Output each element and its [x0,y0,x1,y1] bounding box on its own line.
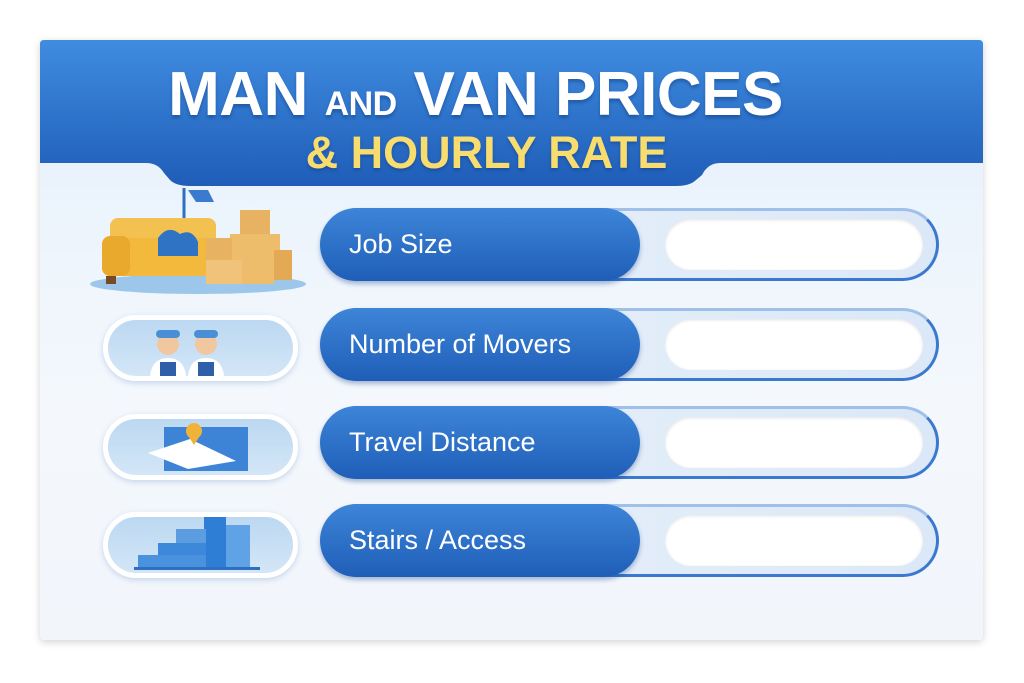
row: Number of Movers [317,308,939,387]
header banner [40,40,983,186]
icon: stairs [103,512,298,578]
subtitle: & HOURLY RATE [306,127,667,178]
row: Job Size [317,208,939,287]
title: MAN AND VAN PRICES [168,60,783,129]
icon: sofa and boxes [90,188,306,294]
row: Stairs / Access [317,504,939,583]
icon: movers [103,315,298,381]
row: Travel Distance [317,406,939,485]
icon: map [103,414,298,480]
row: Job Size: Job Size [349,229,453,259]
row: Number of Movers: Number of Movers [349,329,571,359]
row: Stairs / Access: Stairs / Access [349,525,526,555]
row: Travel Distance: Travel Distance [349,427,536,457]
